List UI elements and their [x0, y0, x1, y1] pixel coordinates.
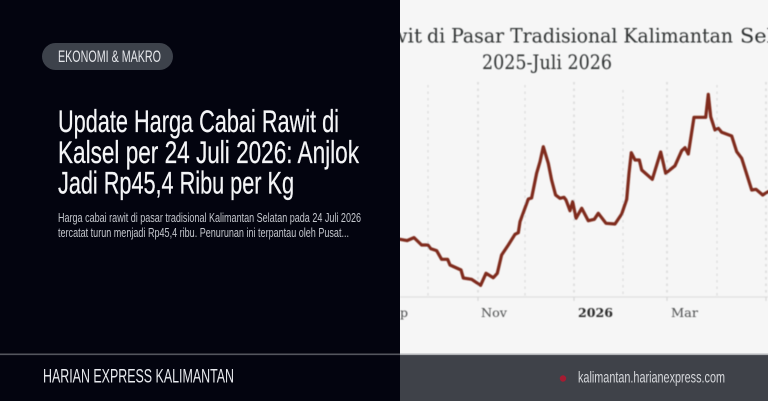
category pill	[42, 43, 173, 70]
chart title: 2025-Juli 2026	[482, 50, 612, 74]
chart title: di Pasar Tradisional Kalimantan	[427, 24, 733, 48]
axis labels: Mar	[671, 305, 698, 320]
axis labels: 2026	[578, 305, 613, 320]
summary text: tercatat turun menjadi Rp45,4 ribu. Penurunan ini terpantau oleh Pusat...	[58, 226, 349, 240]
axis labels	[384, 305, 698, 320]
axis labels: Nov	[481, 305, 508, 320]
headline: Update Harga Cabai Rawit di	[58, 103, 339, 139]
footer bar	[0, 354, 768, 401]
footer brand: HARIAN EXPRESS KALIMANTAN	[43, 366, 234, 388]
chart title	[363, 24, 768, 74]
headline	[58, 103, 359, 200]
icon: red dot	[560, 375, 566, 382]
headline: Kalsel per 24 Juli 2026: Anjlok	[58, 134, 359, 170]
panel: left dark text panel	[0, 0, 400, 354]
panel: chart image background	[363, 0, 768, 354]
category pill: EKONOMI & MAKRO	[58, 47, 161, 66]
summary text	[58, 211, 361, 240]
chart title: Rawit	[363, 24, 422, 48]
line chart: price trend	[400, 82, 768, 301]
headline: Jadi Rp45,4 Ribu per Kg	[58, 164, 294, 200]
summary text: Harga cabai rawit di pasar tradisional Kalimantan Selatan pada 24 Juli 2026	[58, 211, 361, 225]
axis labels: Sep	[384, 305, 408, 320]
